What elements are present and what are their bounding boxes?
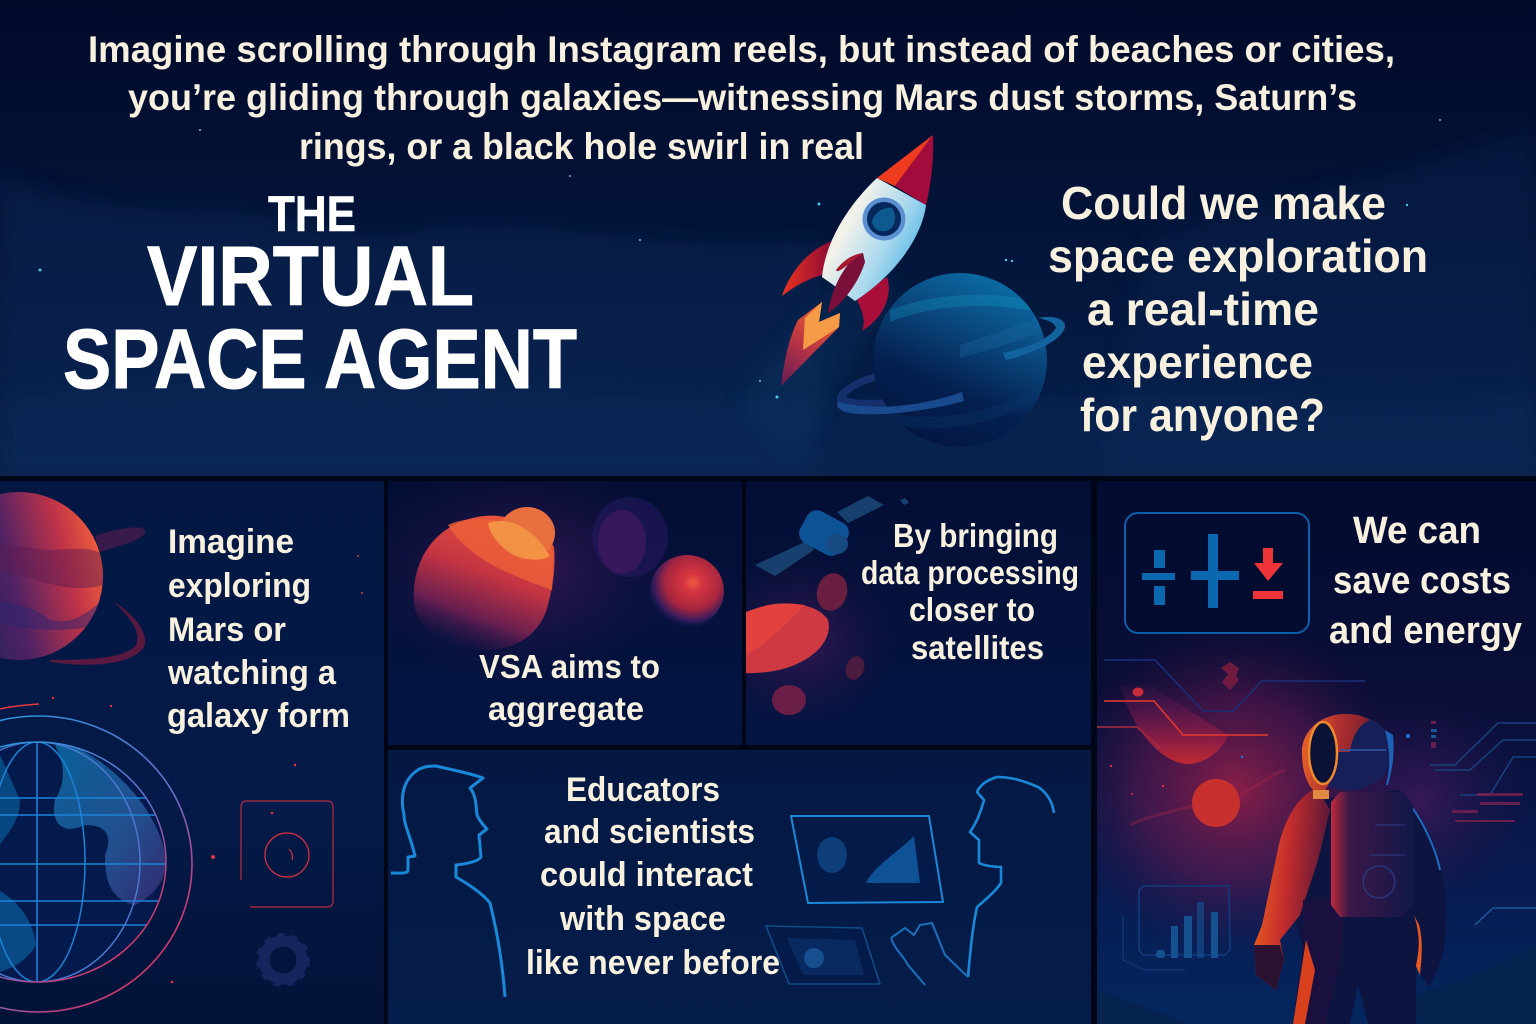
panel text: with space bbox=[559, 900, 726, 938]
panel: save costs bbox=[1055, 481, 1536, 1024]
illustration: red planets bbox=[1120, 662, 1285, 827]
helmet bbox=[1302, 714, 1394, 799]
panel: exploring Mars bbox=[0, 481, 384, 1024]
panel text: VSA aims to bbox=[479, 648, 660, 685]
stars bbox=[1110, 734, 1410, 795]
data readout bbox=[1431, 721, 1523, 822]
panel text: Imagine bbox=[168, 523, 294, 561]
question text: for anyone? bbox=[1080, 389, 1325, 441]
panel text bbox=[526, 771, 780, 982]
intro text: you’re gliding through galaxies—witnessing Mars dust storms, Saturn’s bbox=[128, 77, 1357, 118]
illustration: red planets bbox=[746, 570, 868, 715]
question text: space exploration bbox=[1048, 230, 1428, 282]
panel text: Mars or bbox=[168, 611, 286, 649]
panel text bbox=[861, 517, 1079, 666]
icon: gear bbox=[258, 935, 308, 985]
title: SPACE AGENT bbox=[63, 312, 577, 406]
intro text: Imagine scrolling through Instagram reels, but instead of beaches or cities, bbox=[88, 29, 1395, 70]
icon: cost symbols bbox=[1125, 513, 1309, 633]
intro text: rings, or a black hole swirl in real bbox=[299, 126, 864, 167]
panel: data processing bbox=[746, 481, 1091, 745]
question text bbox=[1048, 177, 1428, 441]
panel text: exploring bbox=[168, 567, 311, 605]
illustration: large orange planet bbox=[414, 507, 555, 650]
panel text: aggregate bbox=[488, 690, 644, 727]
illustration: wireframe globe bbox=[0, 704, 192, 1012]
icon: right person silhouette bbox=[968, 777, 1054, 977]
left leg bbox=[1293, 900, 1345, 1024]
question text: a real-time bbox=[1087, 283, 1319, 335]
panel text: like never before bbox=[526, 944, 780, 982]
title bbox=[64, 196, 577, 390]
panel: header bbox=[0, 0, 1536, 476]
left arm bbox=[1254, 788, 1330, 990]
panel text: watching a bbox=[167, 654, 337, 692]
panel text bbox=[1329, 510, 1522, 652]
panel text: could interact bbox=[540, 856, 753, 894]
panel text: save costs bbox=[1333, 560, 1511, 602]
illustration: astronaut bbox=[1254, 714, 1446, 1024]
rocket flame bbox=[781, 302, 840, 386]
illustration: small red planet bbox=[650, 555, 724, 627]
panel text: By bringing bbox=[893, 517, 1058, 554]
panel text: Educators bbox=[566, 771, 720, 809]
stars bbox=[52, 555, 363, 983]
panel text: data processing bbox=[861, 554, 1079, 591]
question text: Could we make bbox=[1061, 177, 1386, 229]
astronaut body bbox=[1290, 790, 1446, 1024]
panel text: closer to bbox=[909, 591, 1035, 628]
backpack bbox=[1331, 792, 1413, 917]
question text: experience bbox=[1082, 336, 1313, 388]
panel text: galaxy form bbox=[167, 697, 350, 735]
intro text bbox=[88, 29, 1395, 167]
title: THE bbox=[268, 186, 356, 242]
panel text: and scientists bbox=[544, 813, 755, 851]
panel text: We can bbox=[1353, 510, 1481, 552]
icon: small tablet bbox=[766, 926, 880, 984]
icon: left person silhouette bbox=[391, 766, 505, 997]
icon: chart box bbox=[1123, 886, 1230, 970]
icon: hand bbox=[891, 923, 968, 985]
panel text: satellites bbox=[911, 629, 1044, 666]
circuit lines bbox=[1097, 660, 1536, 925]
illustration: red planet bbox=[0, 492, 145, 665]
icon: rocket bbox=[781, 135, 933, 386]
icon: large tablet bbox=[791, 816, 943, 903]
panel: educators bbox=[388, 750, 1091, 1024]
panel text bbox=[167, 523, 350, 735]
panel text bbox=[479, 648, 660, 727]
icon: satellite bbox=[755, 496, 909, 576]
illustration: ringed blue planet bbox=[837, 273, 1065, 447]
icon: device bbox=[241, 801, 333, 907]
panel: VSA aims bbox=[388, 481, 742, 745]
panel text: and energy bbox=[1329, 610, 1522, 652]
illustration: purple blob bbox=[592, 497, 668, 577]
title: VIRTUAL bbox=[147, 229, 474, 323]
